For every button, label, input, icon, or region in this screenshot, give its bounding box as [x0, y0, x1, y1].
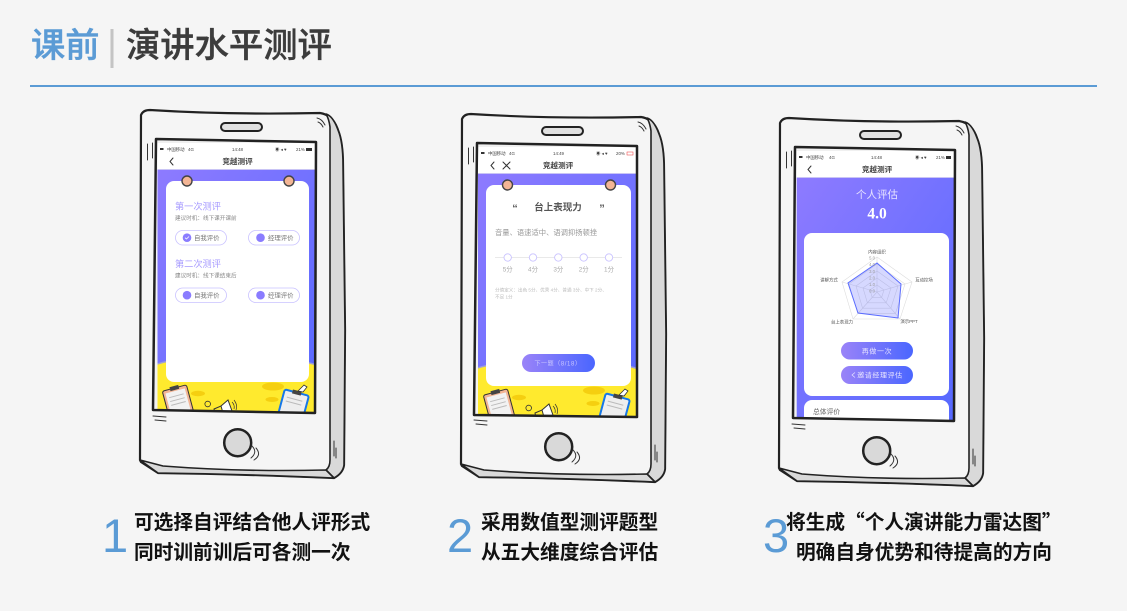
status bar: 14:48: [232, 147, 244, 152]
panel: phone 2: [461, 114, 666, 482]
yellow ground: [158, 361, 314, 412]
radar labels: 讲解方式: [820, 276, 838, 284]
second assessment: 经理评价: [268, 290, 294, 300]
question heading: 台上表现力: [534, 202, 582, 214]
card pins: [502, 180, 616, 190]
radar card: [804, 233, 949, 396]
radar data polygon: [848, 263, 901, 318]
ground decoration: [162, 382, 310, 412]
next button: [522, 354, 595, 372]
score scale: 5分: [503, 264, 513, 274]
status bar: 4G: [509, 151, 515, 156]
status bar: 4G: [829, 155, 835, 160]
step 2 caption: 从五大维度综合评估: [481, 536, 658, 565]
screen outline: [793, 147, 955, 421]
white card: [166, 181, 309, 382]
phone 2 screen: [478, 147, 636, 416]
step 1 caption: [102, 506, 371, 565]
first assessment: 建议时机：线下课开课前: [175, 214, 237, 222]
radar axis values: 1.0: [869, 282, 876, 287]
next button: 下一题（8/18）: [534, 360, 582, 368]
status bar: [481, 151, 634, 156]
title divider: [110, 29, 114, 68]
phone body: [461, 114, 666, 482]
first assessment: [175, 200, 300, 245]
step 3 caption: [763, 506, 1062, 565]
phone 1 screen: [158, 143, 315, 412]
second assessment: 自我评价: [194, 290, 220, 300]
score scale: 4分: [528, 264, 539, 274]
title main: 演讲水平测评: 演讲水平测评: [126, 27, 332, 65]
step number 3: 3: [763, 509, 789, 562]
question heading: “: [512, 203, 518, 215]
invite button: 邀请经理评估: [857, 370, 903, 380]
phone body: [140, 110, 345, 478]
status bar: ◉ ◂ ♥: [275, 146, 287, 153]
status bar: [160, 147, 312, 152]
header rule: [30, 85, 1097, 87]
first assessment: 自我评价: [194, 233, 220, 242]
panel: phone 1: [140, 110, 345, 478]
nav title: 竞越测评: [862, 164, 893, 174]
radar axis values: 5.0: [869, 256, 876, 260]
retry button: 再做一次: [862, 346, 892, 356]
status bar: 14:48: [871, 155, 883, 160]
back arrow: [170, 158, 173, 165]
step 1 caption: 同时训前训后可各测一次: [134, 536, 351, 565]
score scale: 2分: [579, 264, 589, 274]
radar axis values: 0.0: [869, 288, 876, 294]
radar labels: 互动控场: [915, 276, 933, 284]
score scale: 1分: [604, 264, 615, 274]
yellow ground: [478, 365, 636, 416]
panel: phone 3: [779, 118, 984, 486]
second assessment: [175, 258, 300, 302]
retry button: [841, 342, 913, 360]
status bar: ◉ ◂ ♥: [596, 150, 608, 157]
question heading: ”: [599, 203, 605, 215]
title: [31, 27, 332, 68]
question description: 音量、语速适中、语调抑扬顿挫: [495, 228, 598, 237]
step 1 text: 可选择自评结合他人评形式: [134, 506, 371, 535]
status bar: ◉ ◂ ♥: [915, 154, 927, 161]
step 3 caption: 明确自身优势和待提高的方向: [796, 536, 1052, 565]
step 2 caption: [447, 506, 658, 565]
status bar: 4G: [188, 147, 194, 152]
back and close icons: [491, 162, 510, 169]
score scale: 3分: [553, 264, 564, 274]
radar chart: [820, 248, 933, 326]
left screen margin: [790, 144, 797, 424]
icon: share: [852, 372, 855, 378]
radar axis values: 2.0: [869, 276, 876, 280]
status bar: 21%: [936, 155, 945, 160]
status bar: 14:49: [553, 151, 565, 156]
screen outline: [153, 139, 316, 413]
nav title: 竞越测评: [543, 160, 574, 170]
status bar: 中国移动: [806, 154, 824, 161]
step 2 text: 采用数值型测评题型: [481, 506, 658, 535]
left screen margin: [154, 145, 158, 409]
first assessment: 第一次测评: [175, 200, 221, 212]
step 3 text: 将生成“个人演讲能力雷达图”: [786, 506, 1062, 535]
screen outline: [474, 143, 637, 417]
radar axis values: 3.0: [869, 269, 876, 274]
nav title: 竞越测评: [222, 156, 253, 166]
status bar: 20%: [616, 151, 625, 156]
invite button: [841, 366, 913, 384]
overall score: 4.0: [867, 206, 887, 222]
score definition: 分值定义：出色 5分、优秀 4分、普通 3分、中下 2分、: [495, 286, 607, 294]
second assessment: 建议时机：线下课结束后: [175, 272, 237, 280]
summary card: 总体评价: [813, 407, 840, 416]
radar axis values: 4.0: [869, 262, 876, 267]
card pins: [182, 176, 294, 186]
phone 3 screen: [796, 151, 954, 420]
status bar: 中国移动: [167, 146, 185, 153]
radar axis values: [869, 256, 875, 292]
assessment heading: 个人评估: [856, 188, 898, 201]
white card: [486, 185, 631, 386]
radar labels: 台上表现力: [831, 318, 853, 326]
phone body: [779, 118, 984, 486]
status bar: 21%: [296, 147, 305, 152]
ground decoration: [483, 386, 630, 416]
left screen margin: [475, 174, 478, 414]
score definition: 不足 1分: [495, 294, 513, 300]
radar labels: 内容组织: [868, 248, 886, 256]
step number 1: 1: [102, 509, 128, 562]
score scale: [495, 254, 622, 274]
back arrow: [808, 166, 811, 173]
summary card: [804, 400, 949, 440]
question heading: [513, 202, 604, 212]
step number 2: 2: [447, 509, 473, 562]
status bar: [799, 155, 951, 160]
second assessment: 第二次测评: [175, 258, 221, 269]
radar labels: [820, 248, 933, 326]
score definition: [495, 287, 604, 299]
radar labels: 演示PPT: [900, 318, 918, 325]
title accent: 课前: 课前: [31, 27, 100, 65]
status bar: 中国移动: [488, 150, 506, 157]
first assessment: 经理评价: [268, 233, 294, 242]
